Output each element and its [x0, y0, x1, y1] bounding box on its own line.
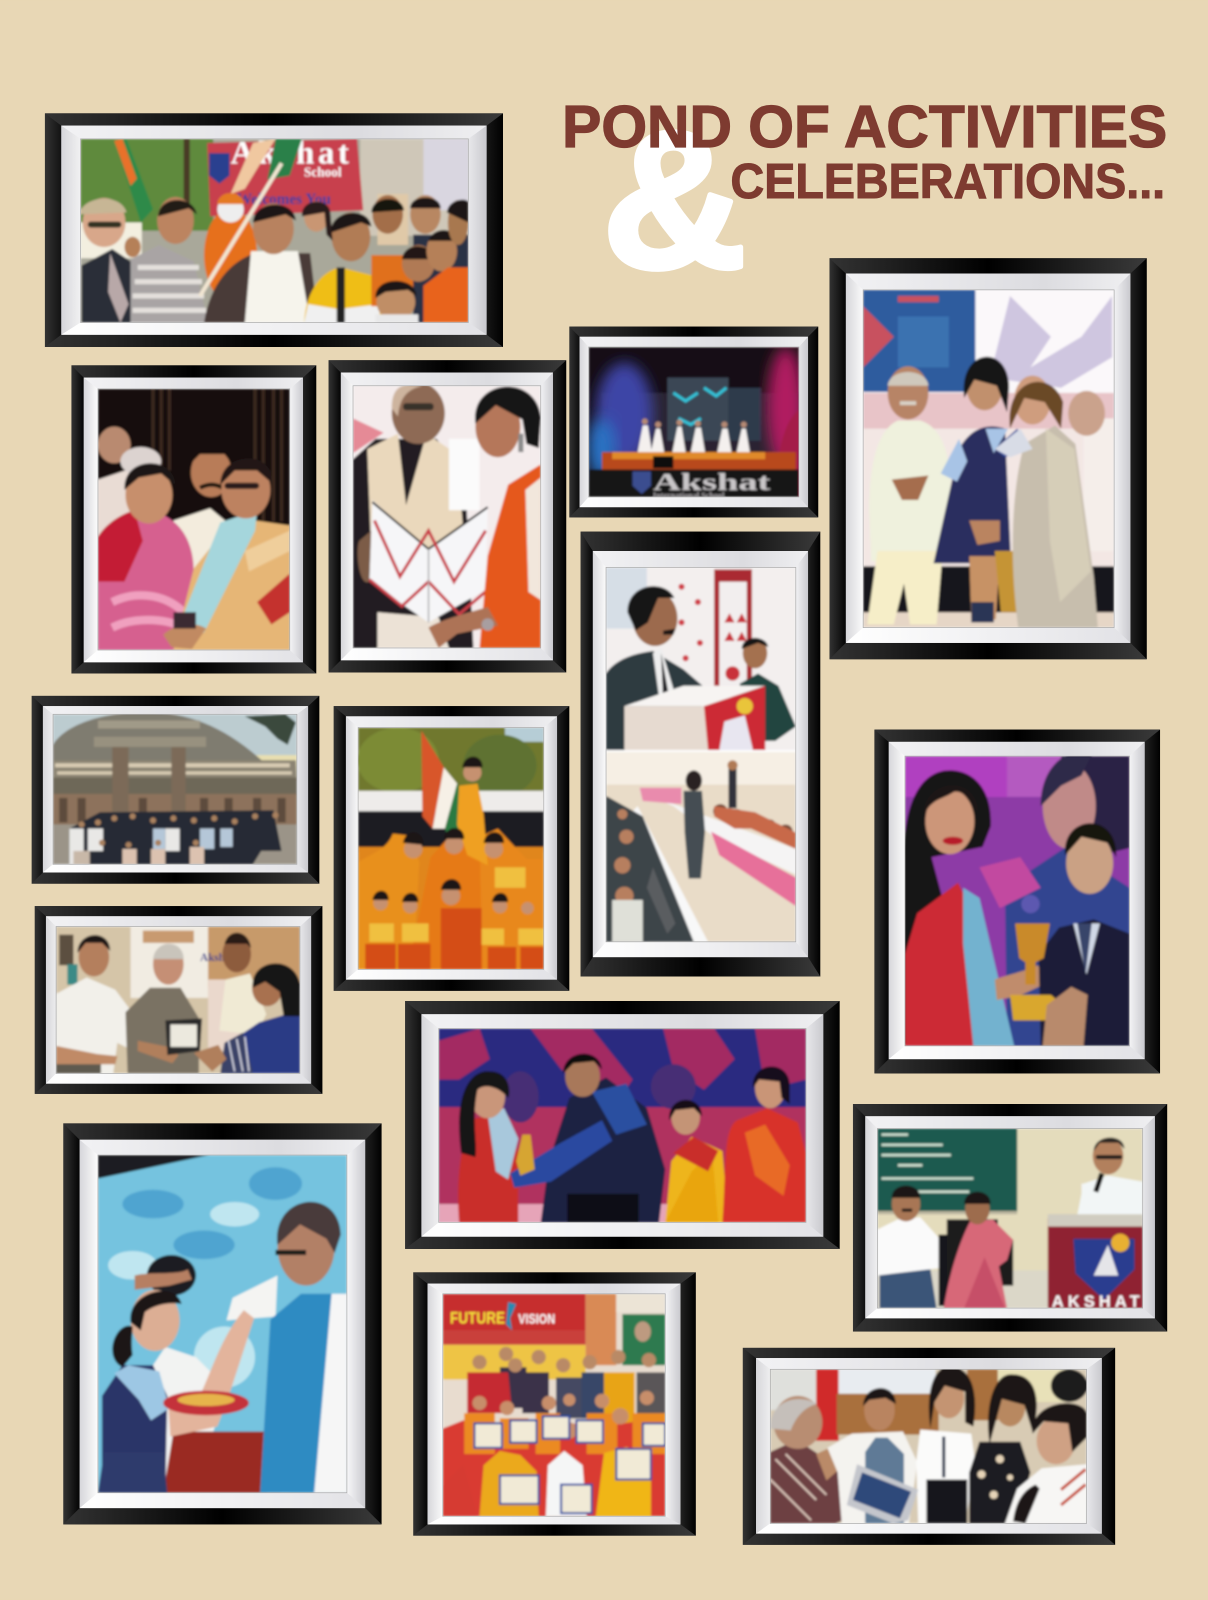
- photo: classroom: [877, 1129, 1143, 1311]
- heading: celeberations: CELEBERATIONS...: [731, 155, 1165, 209]
- photo: classroom: ksl: [1114, 1191, 1130, 1203]
- photo: group with certificates: [443, 1294, 665, 1516]
- framed photo: two women shaking hands: [71, 365, 316, 673]
- framed photo: students with elder and framed gift: [743, 1348, 1115, 1545]
- framed photo: speaker at podium and conference table: [581, 532, 820, 977]
- photo: group with certificates: FUTURE: [450, 1309, 505, 1327]
- photo: stage: International School: [653, 491, 725, 500]
- photo: rally crowd: Welcomes You: [237, 191, 331, 208]
- photo: stage award: [439, 1029, 806, 1222]
- photo: award group: [863, 290, 1114, 628]
- framed photo: certificate presentation: [329, 360, 566, 672]
- photo: memento: Aksha: [200, 952, 231, 964]
- photo: stage: Akshat: [653, 469, 772, 496]
- photo: rally crowd: School: [304, 165, 342, 180]
- photo: certificate: [353, 383, 541, 648]
- framed photo: memento presentation: [35, 906, 322, 1094]
- photo: stupa group: [53, 712, 297, 864]
- framed photo: school trip at Sanchi stupa: [32, 696, 319, 884]
- photo: flag dance: [357, 728, 544, 969]
- photo: students and gift: [770, 1367, 1088, 1523]
- photo: tilak ceremony: [98, 1155, 347, 1493]
- photo: rally crowd: Akshat: [231, 135, 349, 171]
- photo: handshake: [98, 389, 290, 650]
- framed photo: classroom speaker at podium: [853, 1104, 1167, 1332]
- framed photo: trophy on stage with two women: [405, 1001, 840, 1249]
- photo: memento: [56, 927, 300, 1073]
- photo: stage: [588, 347, 806, 500]
- framed photo: dance performance on stage: [569, 327, 818, 517]
- heading: pond of activities: POND OF ACTIVITIES: [562, 93, 1167, 160]
- framed photo: girl applies tilak on dignitary: [63, 1123, 382, 1524]
- photo: trophy presentation: [904, 752, 1129, 1046]
- framed photo: flag dance troupe: [334, 706, 569, 991]
- photo: classroom: AKSHAT: [1052, 1293, 1140, 1311]
- photo: rally crowd: [80, 135, 468, 323]
- framed photo: student with two guests and trophy: [829, 258, 1147, 659]
- framed photo: flag rally with school banner: [45, 113, 503, 347]
- framed photo: Future Vision cultural group: [413, 1272, 696, 1536]
- framed photo: boy receives trophy: [874, 730, 1160, 1073]
- heading: decorative white ampersand: &: [602, 90, 747, 309]
- photo: group with certificates: VISION: [518, 1311, 555, 1327]
- photo: podium speaker over conference: [606, 567, 796, 942]
